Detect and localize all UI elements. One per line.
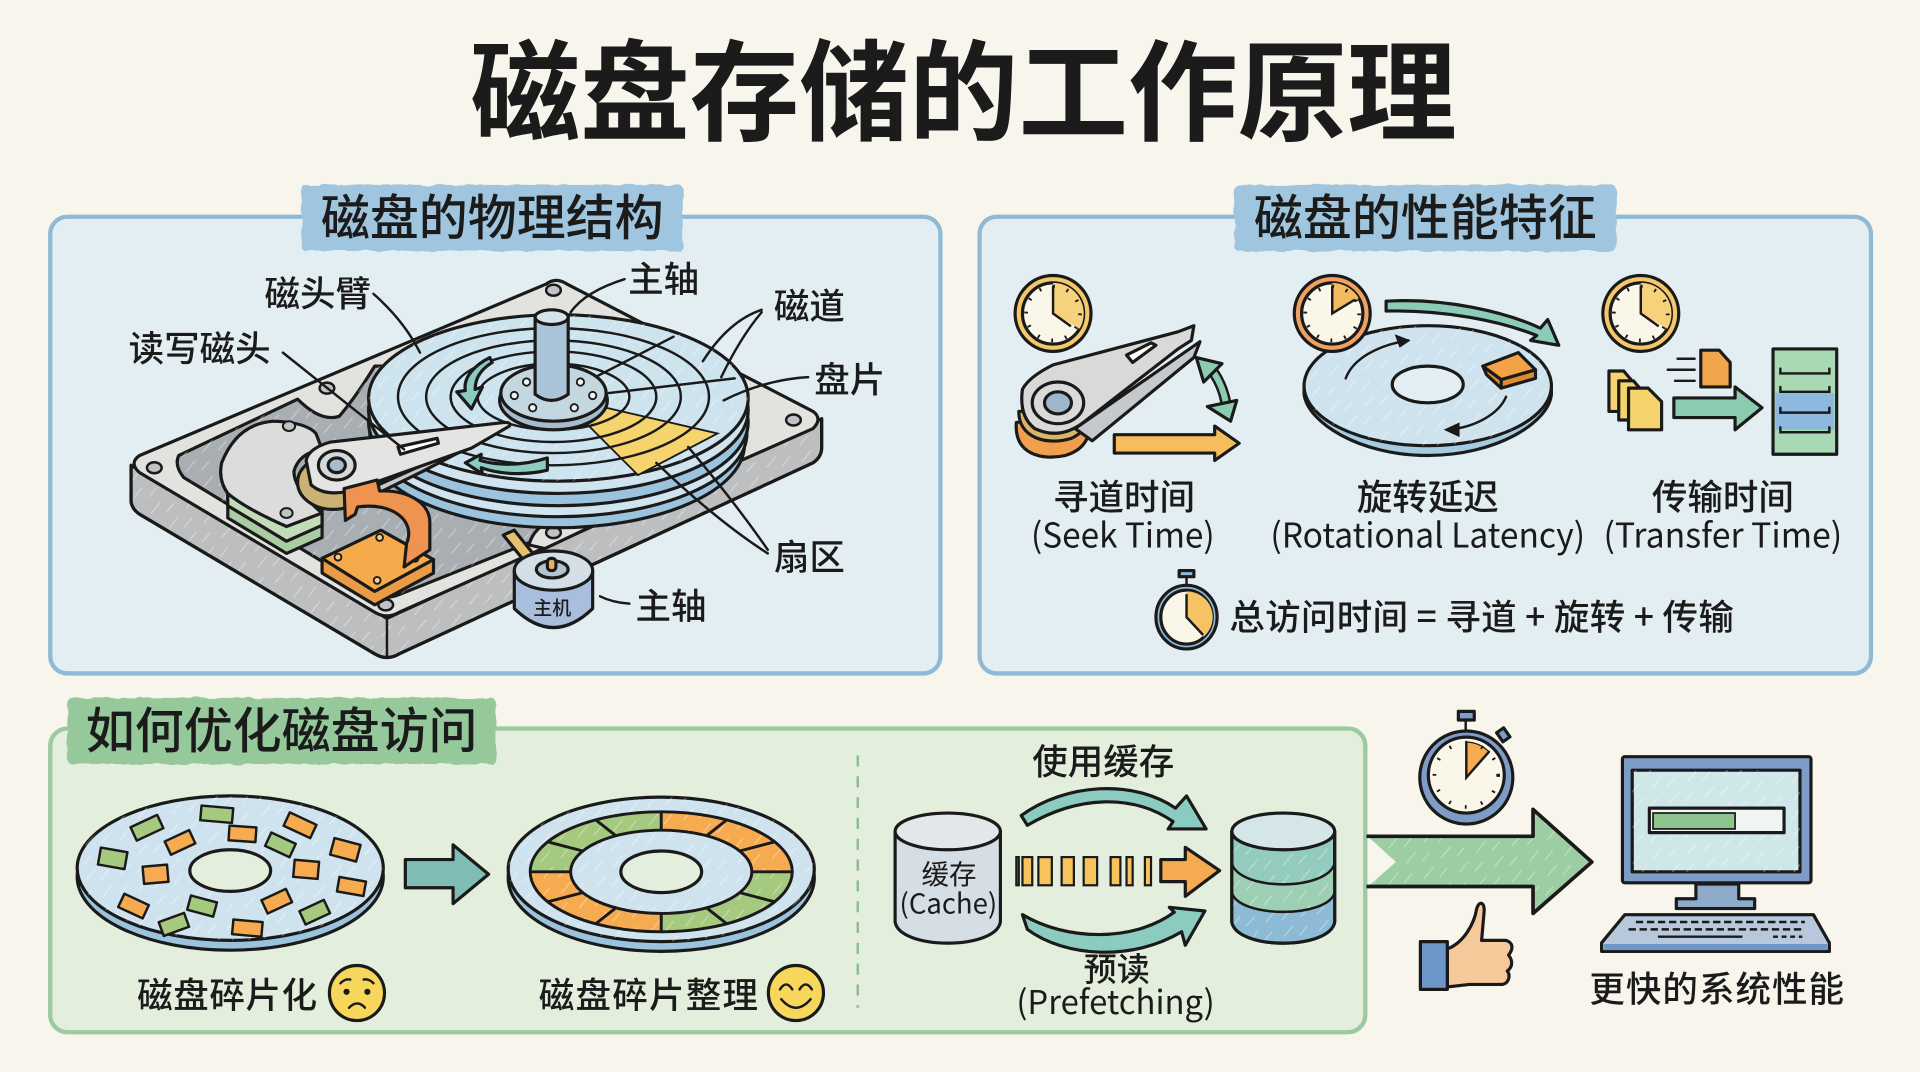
panel: performance (980, 179, 1871, 673)
fragmented disk (77, 796, 383, 950)
label: motor spindle: 主轴 (636, 578, 707, 629)
computer (1602, 757, 1829, 951)
arm pivot base (298, 455, 369, 509)
drive case top (134, 280, 818, 616)
data arrow (1161, 847, 1220, 896)
drive case side (131, 419, 822, 658)
keyboard (1602, 915, 1829, 951)
seek arm icon (1016, 326, 1200, 457)
panel frame (50, 729, 1365, 1032)
label: spindle: 主轴 (628, 251, 699, 302)
label: head arm: 磁头臂 (265, 266, 371, 317)
actuator arm (306, 422, 510, 504)
panel frame (980, 217, 1871, 673)
screws (147, 285, 801, 610)
data blocks (1016, 857, 1151, 885)
stopwatch icon (1156, 571, 1217, 649)
label: fragmentation: 磁盘碎片化 (137, 968, 317, 1019)
monitor (1622, 757, 1811, 883)
file icons (1609, 350, 1730, 430)
hub (500, 365, 607, 430)
label: transfer time (1603, 469, 1842, 557)
label: read-write head: 读写磁头 (129, 321, 271, 372)
divider (857, 755, 859, 1008)
cache cylinder: 缓存 (921, 852, 977, 892)
clock: rotation (1294, 275, 1370, 351)
rotation arrows (457, 358, 547, 474)
panel frame (50, 217, 940, 673)
rotating disk icon (1304, 326, 1551, 455)
happy face (768, 965, 823, 1021)
label: prefetching: (Prefetching) (1016, 976, 1215, 1024)
label: transfer time: 传输时间 (1652, 469, 1794, 520)
lower orange quadrant (530, 872, 661, 932)
label: rotational latency: (Rotational Latency) (1270, 507, 1585, 557)
label: seek time: (Seek Time) (1031, 507, 1215, 557)
horizontal motion arrow (1114, 426, 1239, 460)
orange quadrant (661, 812, 792, 872)
label: transfer time: (Transfer Time) (1603, 507, 1842, 557)
panel: physical structure (50, 179, 940, 673)
motor (503, 530, 593, 628)
label: tracks: 磁道 (774, 278, 845, 329)
tracks (398, 328, 735, 465)
cache cylinder (895, 813, 1000, 943)
label: prefetching (1016, 943, 1215, 1024)
hard drive illustration (131, 280, 822, 658)
heading tab: 磁盘的性能特征 (1254, 179, 1597, 250)
big arrow to result (1367, 809, 1592, 913)
sad face (329, 965, 385, 1021)
heading tab: 磁盘的物理结构 (321, 179, 664, 250)
motor: 主机 (533, 594, 571, 621)
panel: optimization (50, 692, 1365, 1032)
label: platter: 盘片 (814, 352, 885, 403)
corner tab (529, 496, 612, 549)
thumbs up (1420, 903, 1512, 989)
leader lines (283, 279, 808, 604)
defragmented disk (508, 797, 814, 951)
label: rotational latency: 旋转延迟 (1357, 469, 1499, 520)
label: use cache: 使用缓存 (1032, 734, 1174, 785)
storage stack icon (1773, 349, 1837, 454)
cache cylinder: (Cache) (900, 881, 997, 921)
progress bar (1649, 808, 1784, 833)
title: 磁盘存储的工作原理 (471, 5, 1457, 164)
label: seek time (1031, 469, 1215, 557)
label: faster performance: 更快的系统性能 (1589, 962, 1844, 1013)
cavity (177, 366, 722, 597)
actuator magnet (221, 421, 322, 553)
arrow: prefetch (1022, 907, 1205, 952)
label: sector: 扇区 (774, 529, 845, 580)
transfer arrow (1674, 387, 1762, 430)
fragments (98, 806, 366, 937)
flex ribbon (344, 480, 430, 567)
orbit arrow (1386, 301, 1559, 345)
speed lines (1668, 359, 1695, 381)
label: rotational latency (1270, 469, 1585, 557)
defrag arrow (405, 845, 489, 904)
stand (1676, 884, 1755, 909)
platter stack (369, 315, 748, 528)
clock: transfer (1603, 275, 1679, 351)
clock: seek (1015, 275, 1091, 351)
heading tab: 如何优化磁盘访问 (86, 692, 478, 763)
database cylinder (1232, 813, 1335, 943)
vertical motion arrow (1196, 358, 1237, 421)
label: prefetching: 预读 (1084, 943, 1150, 991)
stopwatch: faster (1420, 711, 1513, 824)
green quadrant (661, 872, 792, 932)
spindle (535, 310, 568, 400)
total access time formula: 总访问时间 = 寻道 + 旋转 + 传输 (1229, 589, 1734, 640)
upper green quadrant (530, 812, 661, 872)
label: seek time: 寻道时间 (1053, 469, 1195, 520)
sector (585, 408, 718, 475)
label: defragmentation: 磁盘碎片整理 (539, 968, 758, 1019)
orange block (322, 530, 433, 605)
arrow: cache to disk (1021, 789, 1206, 829)
